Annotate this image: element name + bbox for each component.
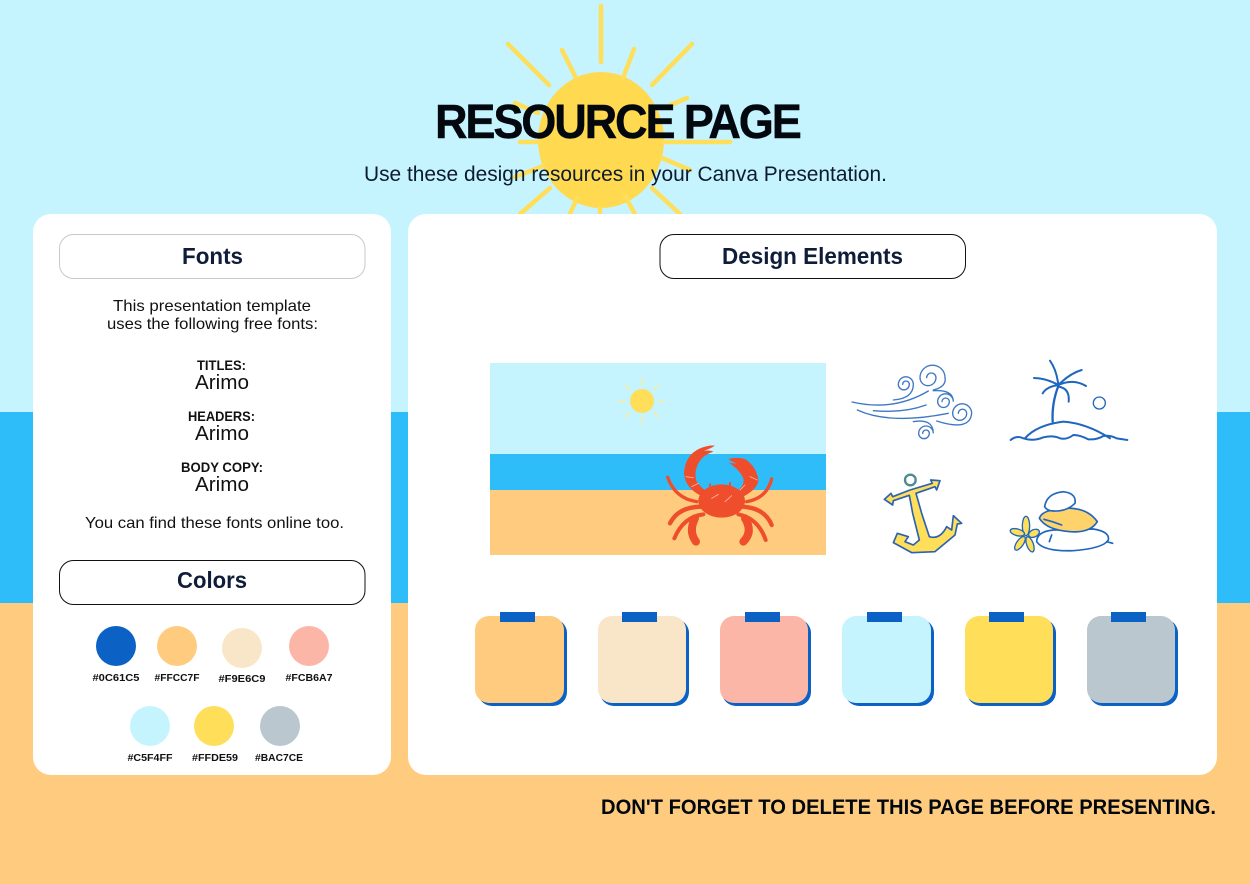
note: orange	[475, 612, 567, 706]
note: light blue	[842, 612, 934, 706]
heading: colors: Colors	[177, 567, 247, 593]
color swatches: #FCB6A7	[286, 672, 333, 684]
beach scene illustration	[490, 363, 826, 555]
color swatches: #BAC7CE	[255, 752, 303, 764]
panel: fonts and colors	[33, 214, 391, 775]
icon: small sun	[618, 378, 664, 424]
note: grey	[1087, 612, 1178, 706]
icon: stones and flower	[1009, 492, 1113, 553]
heading: fonts: Fonts	[182, 243, 243, 269]
sticky notes	[475, 612, 1178, 706]
text block: fonts note: You can find these fonts online too.	[85, 515, 344, 532]
icon: anchor	[884, 475, 962, 553]
heading: fonts	[60, 234, 365, 278]
note: cream	[598, 612, 689, 706]
heading: design elements: Design Elements	[722, 243, 903, 269]
note: pink	[720, 612, 811, 706]
text block: titles font: TITLES:	[197, 358, 246, 373]
icon: wind	[852, 365, 972, 439]
color swatches: #FFCC7F	[154, 672, 200, 684]
note: yellow	[965, 612, 1056, 706]
text block: headers font	[188, 409, 255, 445]
icon: sun	[508, 6, 730, 216]
color swatches	[92, 626, 333, 764]
icon: crab	[668, 446, 772, 542]
heading: colors	[60, 560, 365, 604]
text block: headers font: HEADERS:	[188, 409, 255, 424]
panel: design elements	[408, 214, 1217, 775]
text block: titles font	[195, 358, 249, 394]
color swatches: #FFDE59	[192, 752, 238, 764]
icon: palm island	[1011, 361, 1127, 440]
text block: font intro	[107, 298, 318, 333]
text block: headers font: Arimo	[195, 423, 249, 445]
text block: body copy font: Arimo	[195, 474, 249, 496]
text block: font intro: uses the following free fonts:	[107, 316, 318, 333]
subtitle: Use these design resources in your Canva Presentation.	[364, 163, 887, 186]
text block: font intro: This presentation template	[113, 298, 311, 315]
text block: body copy font: BODY COPY:	[181, 460, 263, 475]
heading: design elements	[660, 234, 966, 278]
color swatches: #0C61C5	[92, 672, 140, 684]
color swatches: #C5F4FF	[128, 752, 173, 764]
color swatches: #F9E6C9	[218, 673, 266, 685]
text block: titles font: Arimo	[195, 372, 249, 394]
footer reminder: DON'T FORGET TO DELETE THIS PAGE BEFORE PRESENTING.	[601, 796, 1216, 819]
text block: body copy font	[181, 460, 263, 496]
title: RESOURCE PAGE	[435, 95, 801, 148]
